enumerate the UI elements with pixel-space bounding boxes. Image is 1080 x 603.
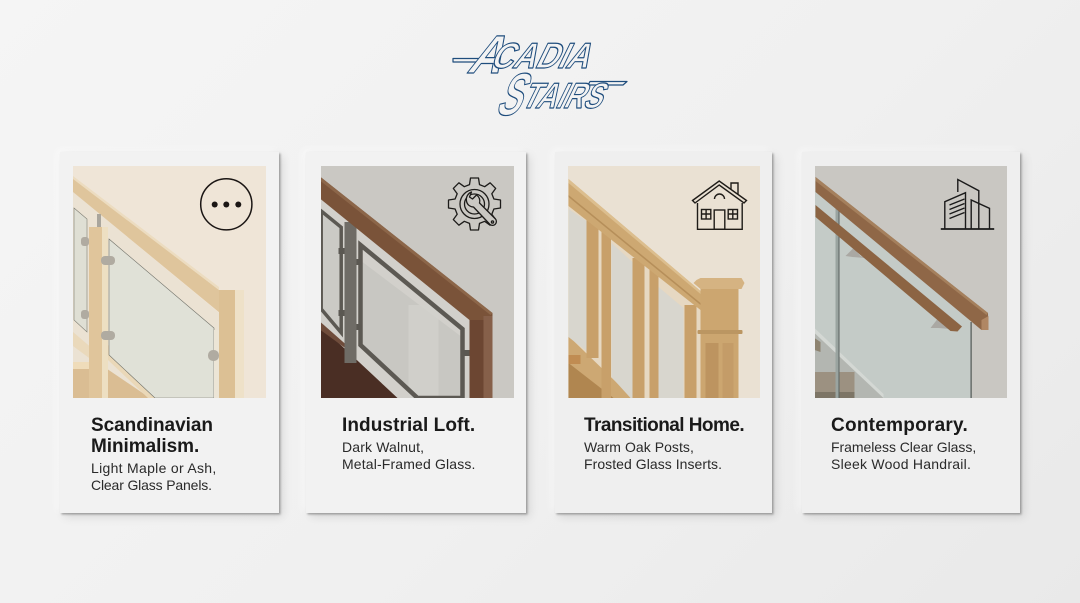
text: Transitional Home: Transitional Home. [584,415,744,436]
text: Industrial Loft [342,415,476,472]
image: walnut stair with metal framed glass [321,166,514,398]
text: Transitional Home [584,415,744,472]
text: Contemporary: Sleek Wood Handrail. [831,456,971,472]
text: Transitional Home: Warm Oak Posts, [584,439,694,455]
image: frameless glass with wood handrail [815,166,1007,398]
text: Industrial Loft: Metal-Framed Glass. [342,456,476,472]
text: Scandinavian Minimalism: Minimalism. [91,436,199,457]
card: Contemporary [802,152,1020,513]
text: Scandinavian Minimalism: Scandinavian [91,415,213,436]
text: Industrial Loft: Dark Walnut, [342,439,424,455]
icon: house [692,181,746,229]
text: Transitional Home: Frosted Glass Inserts. [584,456,722,472]
text: Contemporary [831,415,976,472]
image: oak posts with frosted glass [568,166,760,398]
image: maple stair with clear glass [73,166,266,398]
icon: gear and wrench [448,178,500,230]
logo: Acadia Stairs: CADIA [485,37,602,77]
logo: Acadia Stairs [452,25,628,125]
card: Transitional Home [555,152,772,513]
logo: Acadia Stairs: TAIRS [516,77,615,117]
card: Scandinavian Minimalism [60,152,279,513]
logo: Acadia Stairs: A [460,25,523,85]
text: Industrial Loft: Industrial Loft. [342,415,475,436]
text: Scandinavian Minimalism: Clear Glass Panels. [91,477,212,493]
card: Industrial Loft [306,152,526,513]
icon: city buildings [940,180,994,229]
text: Contemporary: Frameless Clear Glass, [831,439,976,455]
icon: ellipsis circle [201,179,252,230]
text: Contemporary: Contemporary. [831,415,968,436]
text: Scandinavian Minimalism: Light Maple or Ash, [91,460,217,476]
text: Scandinavian Minimalism [91,415,217,493]
